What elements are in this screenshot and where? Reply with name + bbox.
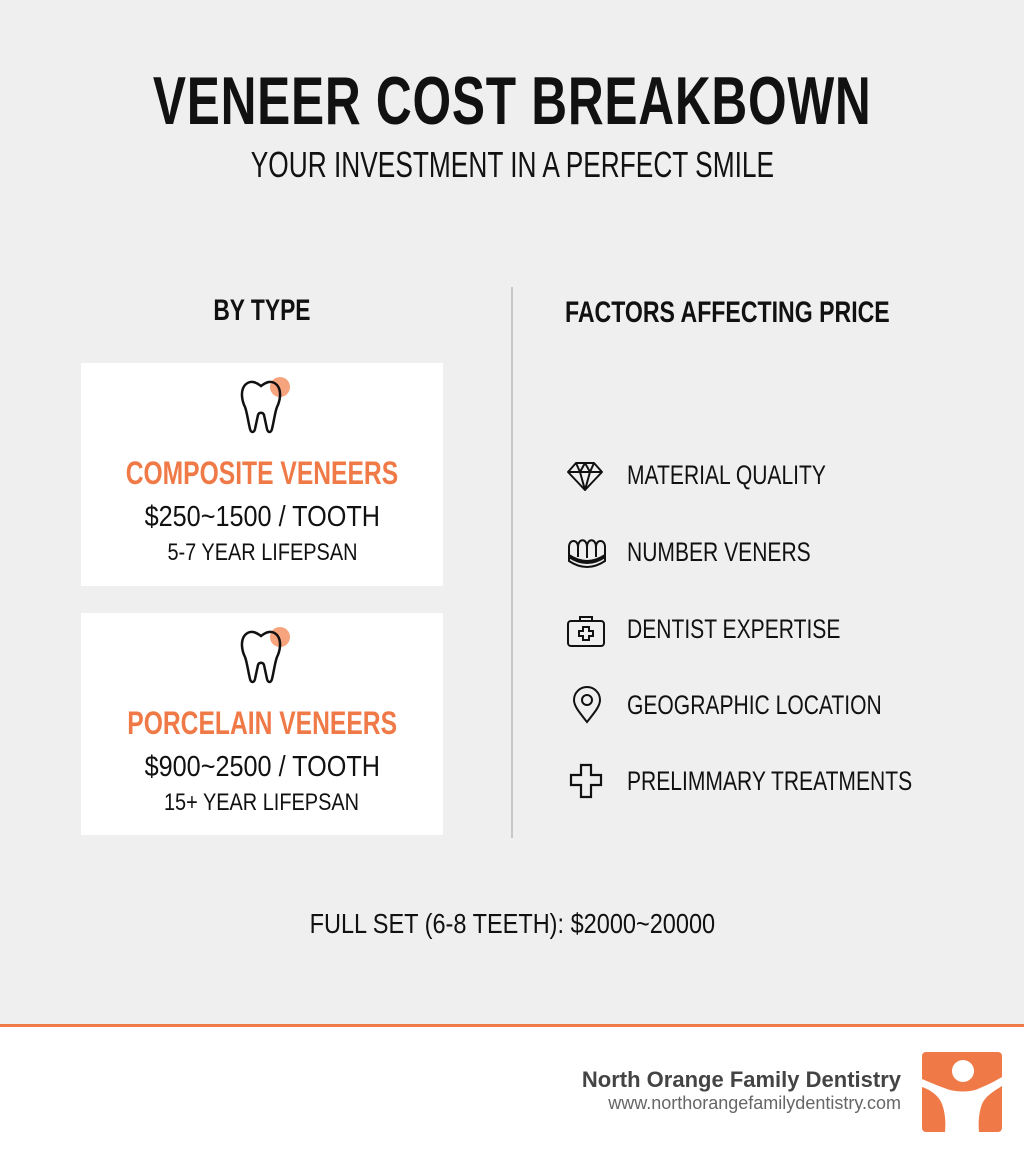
factor: geographic location [573, 686, 882, 724]
title: VENEER COST BREAKBOWN [153, 63, 871, 139]
icon: map pin [573, 686, 601, 724]
factor: dentist expertise: DENTIST EXPERTISE [627, 614, 840, 644]
brand name: North Orange Family Dentistry [582, 1067, 901, 1092]
icon: diamond [567, 462, 603, 491]
footer [0, 1024, 1024, 1154]
factor: number veneers: NUMBER VENERS [627, 537, 811, 567]
panel: composite veneers [81, 363, 443, 586]
heading: factors: FACTORS AFFECTING PRICE [565, 296, 890, 329]
factor: material quality: MATERIAL QUALITY [627, 460, 826, 490]
icon: cross [570, 764, 602, 798]
panel: porcelain veneers [81, 613, 443, 835]
price: $900~2500 / TOOTH [144, 751, 380, 783]
factor: geographic location: GEOGRAPHIC LOCATION [627, 690, 882, 720]
divider [511, 287, 513, 838]
icon: tooth [240, 627, 290, 684]
lifespan: 5-7 YEAR LIFEPSAN [167, 539, 357, 566]
heading: by type: BY TYPE [213, 294, 311, 327]
label: PORCELAIN VENEERS [127, 705, 397, 741]
full set note: FULL SET (6-8 TEETH): $2000~20000 [309, 908, 715, 939]
icon: teeth [568, 539, 606, 568]
label: COMPOSITE VENEERS [126, 455, 398, 491]
factor: preliminary treatments: PRELIMMARY TREATMENTS [627, 766, 912, 796]
subtitle: YOUR INVESTMENT IN A PERFECT SMILE [250, 144, 774, 185]
icon: medical kit [567, 616, 605, 647]
lifespan: 15+ YEAR LIFEPSAN [164, 789, 360, 816]
price: $250~1500 / TOOTH [144, 501, 380, 533]
brand url: www.northorangefamilydentistry.com [608, 1093, 901, 1113]
logo [922, 1052, 1002, 1132]
icon: tooth [240, 377, 290, 434]
